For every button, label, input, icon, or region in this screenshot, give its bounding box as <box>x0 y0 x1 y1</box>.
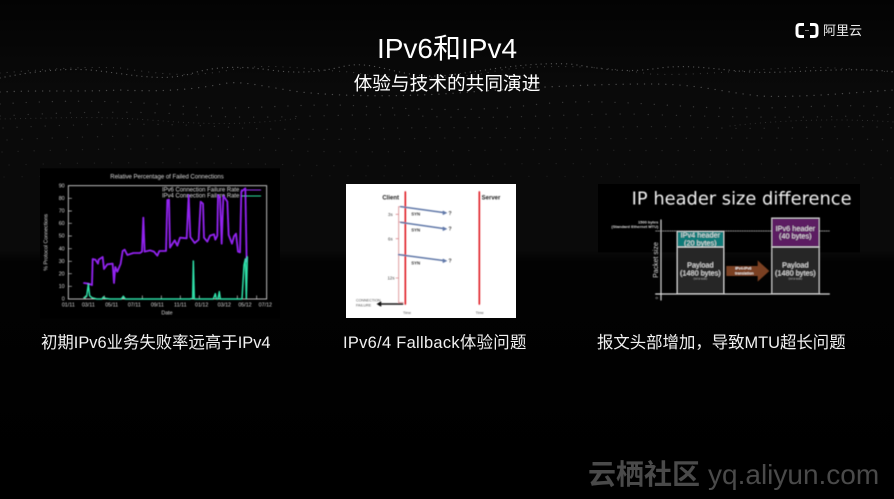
chart axes: 20 <box>59 271 65 277</box>
IPv4 failure line <box>84 257 247 299</box>
IPv6 stack: (not to scale) <box>789 277 802 280</box>
timeout labels: 12s <box>388 276 394 281</box>
panel: IP header size diagram <box>598 184 860 300</box>
panel: fallback sequence diagram <box>346 184 516 318</box>
chart axes: 60 <box>59 221 65 227</box>
subtitle: 体验与技术的共同演进 <box>354 73 540 94</box>
IPv4 stack: (1480 bytes) <box>680 268 721 277</box>
MTU dashed line <box>656 230 829 232</box>
chart legend: IPv4 Connection Failure Rate <box>162 193 240 199</box>
SYN labels <box>411 211 452 265</box>
SYN labels: ? <box>448 227 452 233</box>
SYN labels: ? <box>448 259 452 265</box>
SYN arrows <box>399 207 446 262</box>
IPv4 stack: IPv4 header <box>681 231 721 240</box>
chart axes <box>43 183 272 317</box>
panel: IP header size diagram: Packet size <box>653 242 660 278</box>
chart axes: 11/11 <box>174 302 187 308</box>
logo icon <box>797 24 817 36</box>
chart axes: 30 <box>59 259 65 265</box>
timeline lines <box>405 192 479 304</box>
caption: MTU: 报文头部增加，导致MTU超长问题 <box>597 334 846 352</box>
panel: IP header size diagram: 0 <box>655 297 659 299</box>
IPv4 stack: Payload <box>687 261 714 270</box>
chart axes: 01/12 <box>195 302 208 308</box>
IPv4 stack: (20 bytes) <box>684 238 717 247</box>
watermark: 云栖社区 yq.aliyun.com <box>588 459 879 490</box>
chart axes: Date <box>161 311 173 317</box>
axis labels: (Standard Ethernet MTU) <box>611 224 659 229</box>
SYN labels: ? <box>448 211 452 217</box>
timeout bracket <box>396 207 404 303</box>
chart axes: 03/11 <box>82 302 95 308</box>
dotted wave background <box>0 64 894 178</box>
connection failure label: CONNECTION <box>356 299 381 303</box>
chart axes: 90 <box>59 183 65 189</box>
IPv4 stack <box>677 231 724 294</box>
size axes <box>656 220 829 300</box>
axis labels: 1500 bytes <box>638 219 659 224</box>
chart axes: 03/12 <box>218 302 231 308</box>
connection failure arrow <box>378 302 403 306</box>
translation arrow: translation <box>735 272 754 276</box>
IPv6 stack: IPv6 header <box>776 224 816 233</box>
chart axes: 40 <box>59 246 65 252</box>
server label: Server <box>482 196 501 202</box>
diagram heading: IP header size difference <box>632 189 852 210</box>
connection failure label: FAILURE <box>356 304 372 308</box>
IPv6 stack <box>772 218 819 294</box>
timeout labels <box>388 212 394 281</box>
IPv6 failure line <box>84 188 247 285</box>
caption: fallback: IPv6/4 Fallback体验问题 <box>343 334 527 352</box>
translation arrow: IPv4-IPv6 <box>735 266 751 270</box>
IPv6 stack: Payload <box>782 261 809 270</box>
chart title: Relative Percentage of Failed Connections <box>110 175 224 181</box>
chart axes: 05/11 <box>105 302 118 308</box>
title: IPv6和IPv4 <box>377 33 517 64</box>
SYN labels: SYN <box>411 212 420 217</box>
translation arrow <box>726 260 769 282</box>
IPv6 stack: (40 bytes) <box>779 232 812 241</box>
client label: Client <box>382 196 399 202</box>
chart axes: 80 <box>59 196 65 202</box>
chart axes: % Protocol Connections <box>43 214 49 271</box>
timeout labels: 3s <box>388 212 393 217</box>
time labels: Time <box>476 311 484 315</box>
chart axes: 05/12 <box>238 302 252 308</box>
SYN labels: SYN <box>411 228 420 233</box>
timeout labels: 6s <box>388 236 393 241</box>
chart axes: 07/11 <box>128 302 141 308</box>
chart axes: 50 <box>59 234 65 240</box>
connection failure label <box>356 299 381 308</box>
chart legend <box>162 188 261 199</box>
chart axes: 70 <box>59 209 65 215</box>
time labels: Time <box>403 311 411 315</box>
time labels <box>403 311 484 315</box>
chart axes: 10 <box>59 284 65 290</box>
chart axes: 09/11 <box>151 302 164 308</box>
IPv6 stack: (1480 bytes) <box>775 268 816 277</box>
axis labels <box>611 219 659 229</box>
chart legend: IPv6 Connection Failure Rate <box>162 188 240 194</box>
chart axes: 01/11 <box>62 302 75 308</box>
IPv4 stack: (not to scale) <box>694 277 707 280</box>
caption: failure rate: 初期IPv6业务失败率远高于IPv4 <box>41 334 271 352</box>
panel: failure rate chart <box>40 168 280 318</box>
chart axes: 0 <box>62 296 65 302</box>
SYN labels: SYN <box>411 260 420 265</box>
logo text: 阿里云 <box>823 23 862 38</box>
chart axes: 07/12 <box>259 302 272 308</box>
